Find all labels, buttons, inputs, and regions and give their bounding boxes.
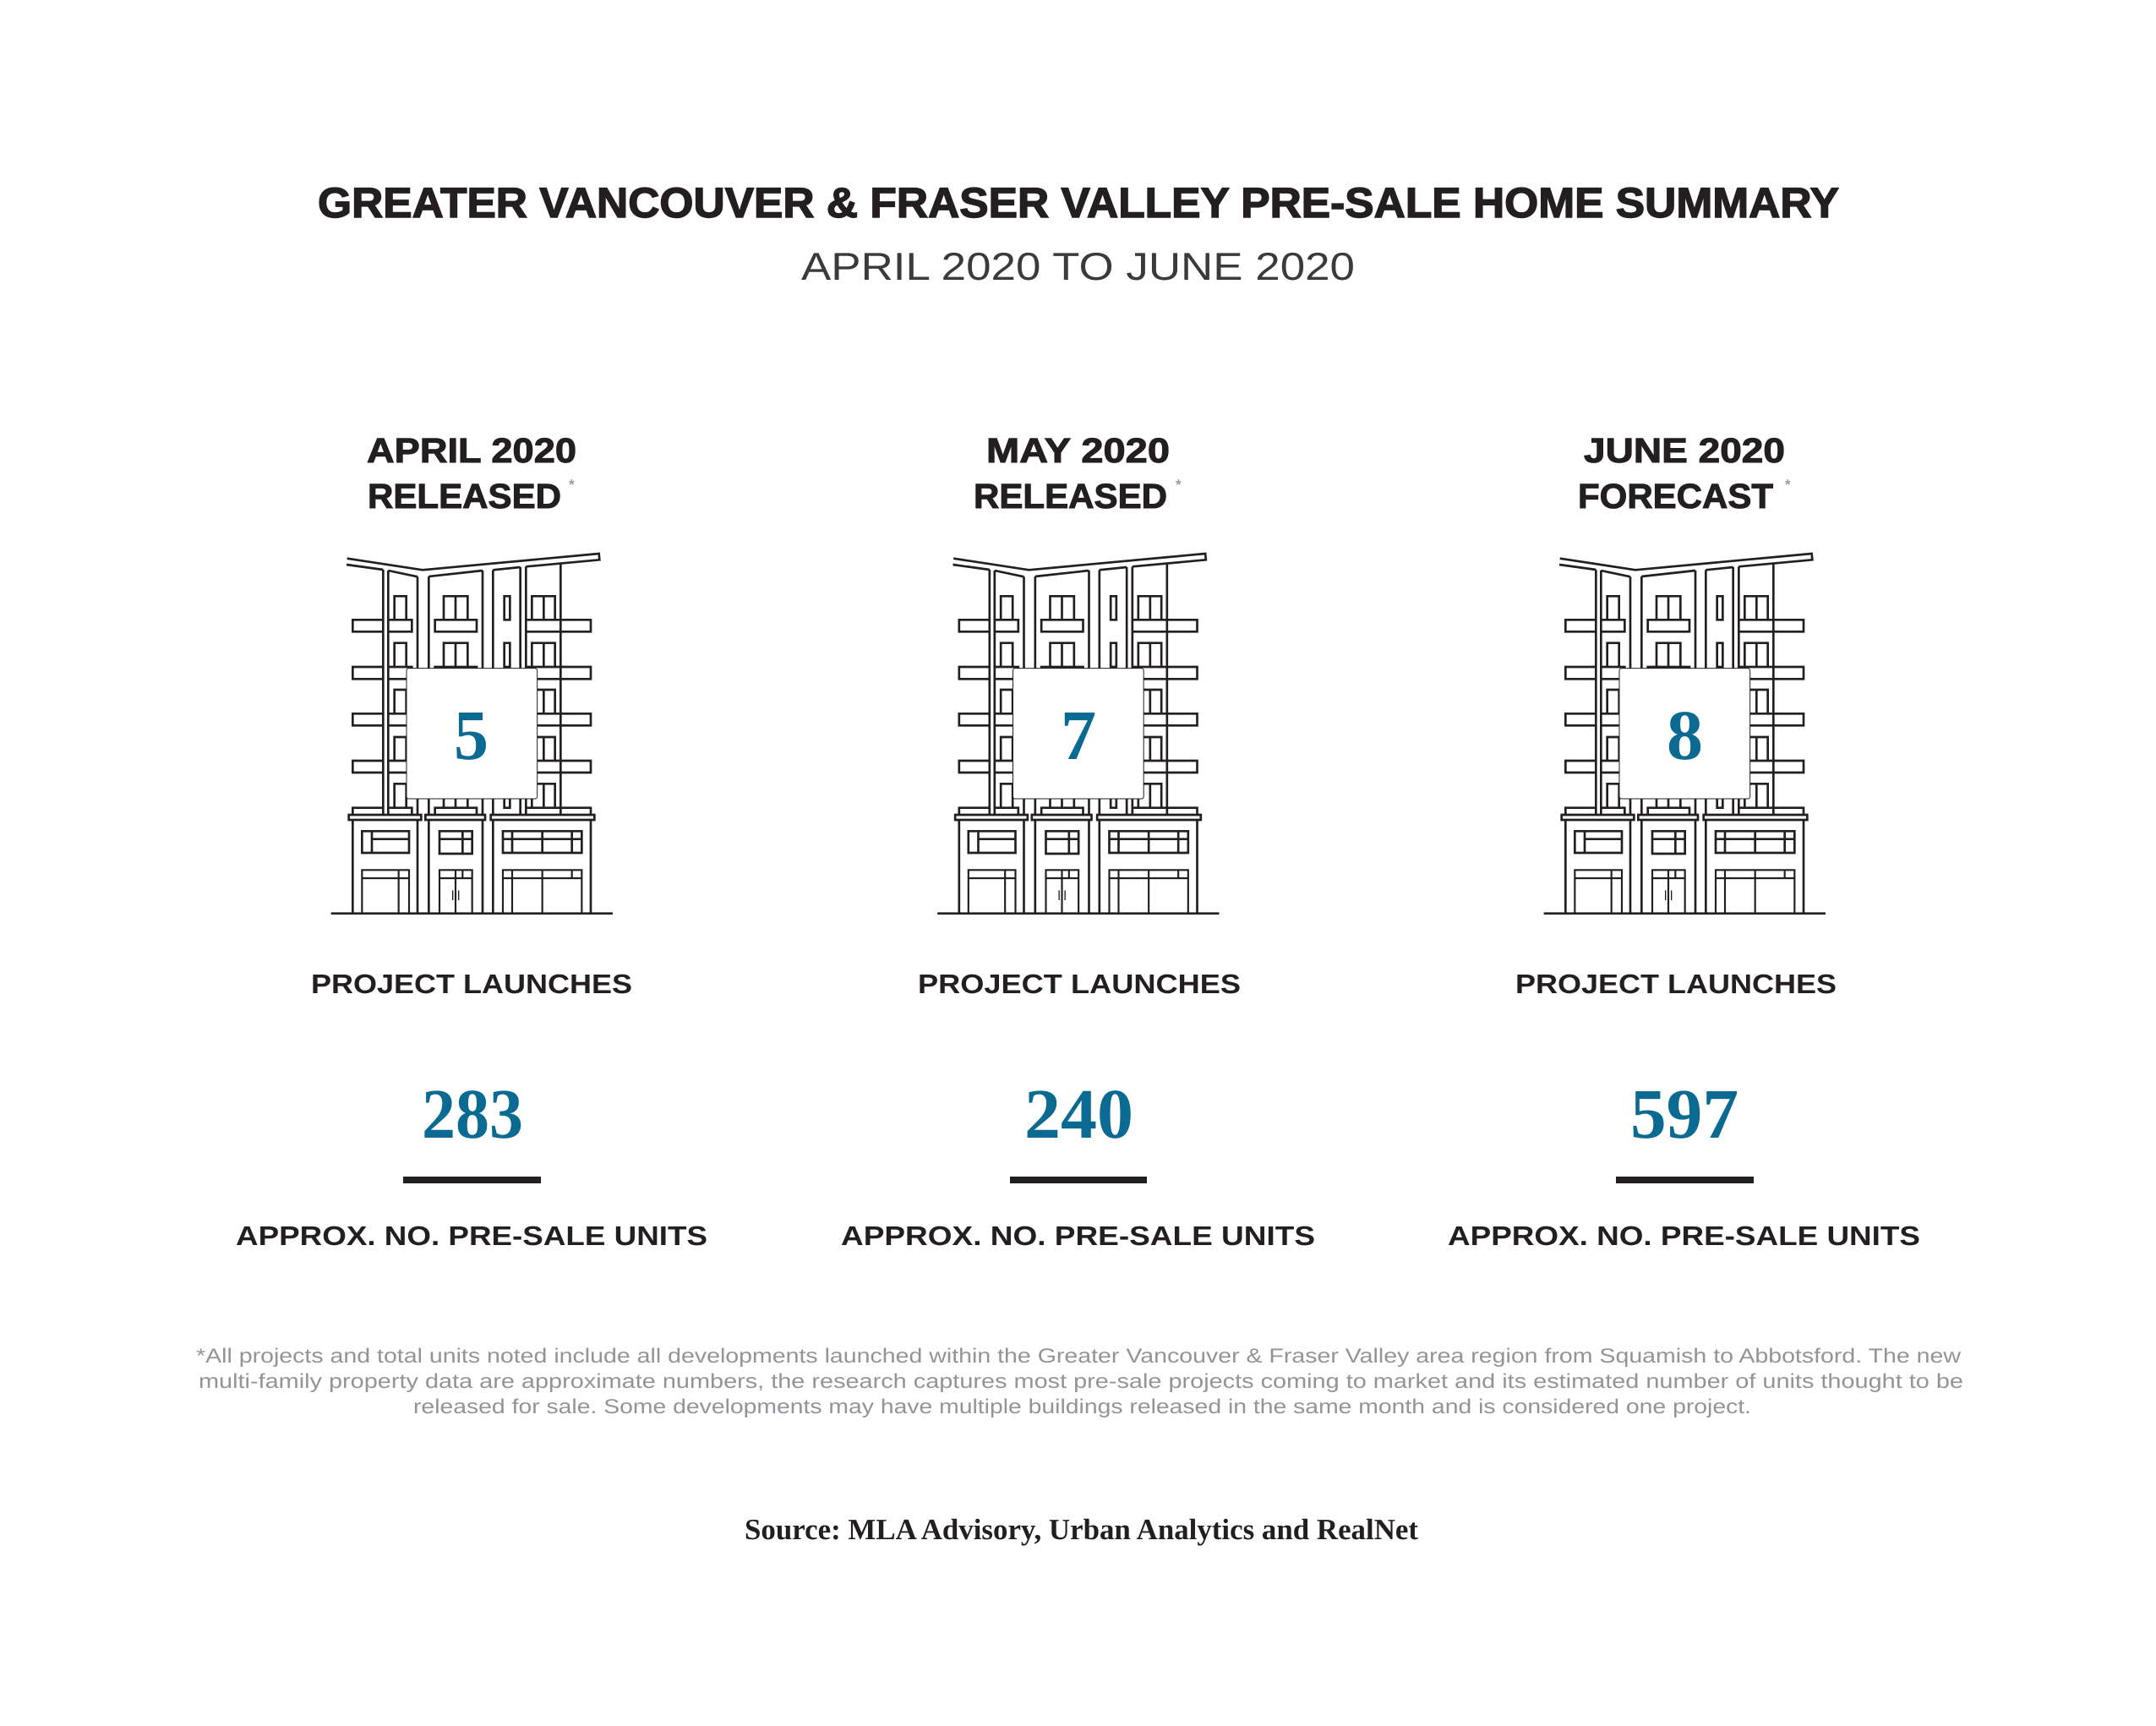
divider bar [1010, 1177, 1147, 1183]
project count: 5: 5 [454, 696, 489, 775]
footnote: *All projects and total units noted include all developments launched within the Greater Vancouver & Fraser Valley area region from Squamish to Abbotsford. The new [196, 1345, 1962, 1368]
heading: Released: RELEASED [368, 477, 561, 516]
panel: April 2020 [236, 431, 707, 1251]
label: approx units: APPROX. NO. PRE-SALE UNITS [236, 1221, 707, 1251]
heading: April 2020: APRIL 2020 [367, 431, 576, 470]
icon: building [331, 554, 613, 914]
label: approx units: APPROX. NO. PRE-SALE UNITS [1448, 1221, 1920, 1251]
icon: building [937, 554, 1219, 914]
source line: Source: MLA Advisory, Urban Analytics and RealNet [745, 1513, 1418, 1546]
footnote: released for sale. Some developments may have multiple buildings released in the same month and is considered one project. [413, 1396, 1751, 1418]
heading: Forecast: FORECAST [1578, 477, 1773, 516]
panel: May 2020 [841, 431, 1315, 1251]
panel: June 2020 [1448, 431, 1920, 1251]
footnote: multi-family property data are approximate numbers, the research captures most pre-sale projects coming to market and its estimated number of units thought to be [199, 1370, 1963, 1393]
icon: building [1544, 554, 1826, 914]
asterisk: * [1176, 477, 1182, 493]
heading: Released: RELEASED [974, 477, 1167, 516]
label: project launches: PROJECT LAUNCHES [311, 969, 632, 999]
footnote [196, 1345, 1963, 1418]
unit count: 597: 597 [1630, 1075, 1738, 1154]
heading: June 2020: JUNE 2020 [1584, 431, 1785, 470]
project count: 7: 7 [1061, 696, 1096, 775]
unit count: 283: 283 [422, 1075, 523, 1154]
title: GREATER VANCOUVER & FRASER VALLEY PRE-SALE HOME SUMMARY [318, 179, 1839, 227]
subtitle: APRIL 2020 TO JUNE 2020 [801, 244, 1355, 288]
divider bar [1616, 1177, 1754, 1183]
asterisk: * [569, 477, 575, 493]
label: project launches: PROJECT LAUNCHES [918, 969, 1241, 999]
heading: May 2020: MAY 2020 [986, 431, 1170, 470]
project count: 8: 8 [1667, 696, 1703, 775]
asterisk: * [1785, 477, 1791, 493]
label: project launches: PROJECT LAUNCHES [1515, 969, 1837, 999]
unit count: 240: 240 [1024, 1075, 1133, 1154]
divider bar [403, 1177, 541, 1183]
label: approx units: APPROX. NO. PRE-SALE UNITS [841, 1221, 1315, 1251]
